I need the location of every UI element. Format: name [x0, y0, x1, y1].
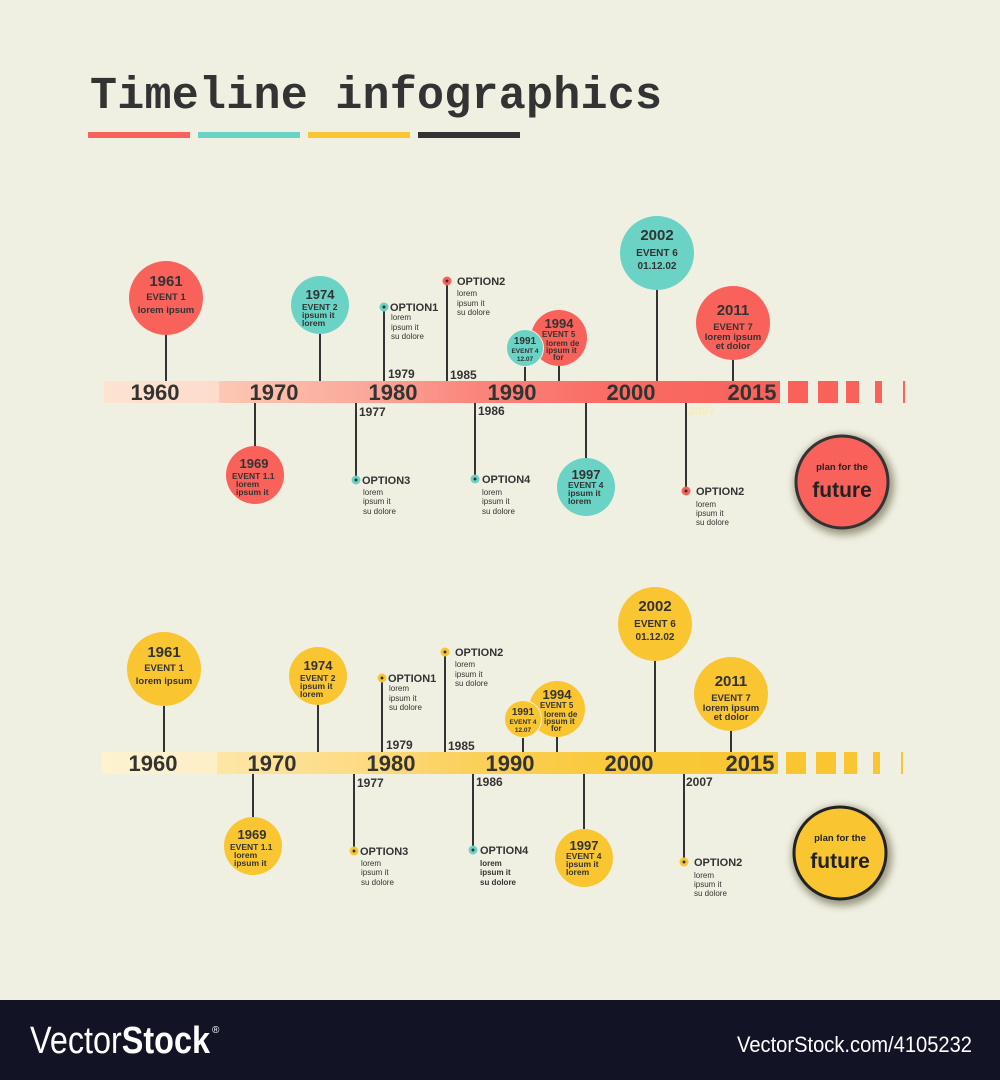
event 2011 — [696, 286, 770, 360]
event 1961: EVENT 1 — [146, 292, 187, 303]
year labels — [357, 738, 713, 790]
event 1961: 1961 — [149, 273, 183, 290]
options: su dolore — [694, 889, 727, 898]
panel: bottom timeline (yellow) — [102, 587, 903, 906]
year labels: 1986 — [478, 404, 505, 418]
event 1974: ipsum it — [302, 310, 335, 320]
event 1974: lorem — [302, 318, 326, 328]
event 1969: ipsum it — [234, 858, 267, 868]
event 1969: 1969 — [238, 827, 266, 842]
options: lorem — [696, 500, 716, 509]
event 1961: lorem ipsum — [136, 676, 192, 687]
event 1991: 12.07 — [515, 727, 532, 734]
timeline bar: 1970 — [250, 380, 298, 405]
event 1974 — [289, 647, 347, 705]
options: ipsum it — [696, 509, 724, 518]
options: OPTION4 — [480, 845, 529, 857]
options: su dolore — [361, 878, 394, 887]
event 2002: 2002 — [640, 227, 674, 244]
options: OPTION2 — [694, 857, 742, 869]
options: ipsum it — [391, 323, 419, 332]
timeline bar: 1990 — [488, 380, 536, 405]
options: lorem — [455, 660, 475, 669]
event 2011: EVENT 7 — [711, 693, 751, 704]
year labels: 1985 — [450, 368, 477, 382]
event 1974: 1974 — [306, 287, 335, 302]
event 2002: 01.12.02 — [638, 261, 677, 272]
options: ipsum it — [363, 497, 391, 506]
event 1974: lorem — [300, 689, 324, 699]
event 1969: ipsum it — [236, 487, 269, 497]
event 1997 — [555, 829, 613, 887]
event 1974 — [291, 276, 349, 334]
event 2011: lorem ipsum — [703, 703, 759, 714]
event 1974: EVENT 2 — [300, 673, 336, 683]
timeline bar: 1980 — [369, 380, 417, 405]
footer: VectorStock.com/4105232 — [737, 1032, 972, 1057]
event 2011: lorem ipsum — [705, 332, 761, 343]
panel: top timeline (red/teal) — [104, 216, 905, 535]
timeline bar — [102, 751, 903, 776]
options — [350, 647, 742, 898]
event 2002: EVENT 6 — [636, 248, 678, 259]
event 2011: et dolor — [714, 712, 749, 723]
year labels: 1985 — [448, 739, 475, 753]
footer: VectorStock — [30, 1020, 211, 1062]
event 1961 — [129, 261, 203, 335]
options: su dolore — [389, 703, 422, 712]
options: ipsum it — [455, 670, 483, 679]
footer: ® — [212, 1025, 220, 1036]
options: ipsum it — [361, 868, 389, 877]
event 1994 — [531, 310, 587, 366]
options: lorem — [457, 289, 477, 298]
event 1994: ipsum it — [546, 346, 577, 355]
options: OPTION3 — [362, 475, 410, 487]
event 1994: EVENT 5 — [540, 701, 574, 710]
year labels — [359, 367, 715, 419]
timeline bar: 2015 — [728, 380, 776, 405]
event 1969: lorem — [234, 850, 258, 860]
options: OPTION2 — [455, 647, 503, 659]
event 1991 — [504, 700, 542, 738]
event 1969: EVENT 1.1 — [232, 471, 275, 481]
event 1997: 1997 — [572, 467, 600, 482]
options: OPTION2 — [457, 276, 505, 288]
event 2011: 2011 — [717, 302, 749, 319]
options: lorem — [363, 488, 383, 497]
options: su dolore — [480, 878, 517, 887]
event 1974: ipsum it — [300, 681, 333, 691]
options: lorem — [482, 488, 502, 497]
options: ipsum it — [694, 880, 722, 889]
event 2011: 2011 — [715, 673, 747, 690]
options: OPTION1 — [390, 302, 438, 314]
timeline bar: 2000 — [607, 380, 655, 405]
future circle: future — [812, 479, 872, 502]
event 1994: 1994 — [545, 316, 574, 331]
timeline bar: 1970 — [248, 751, 296, 776]
event 1961: 1961 — [147, 644, 181, 661]
options: lorem — [480, 859, 502, 868]
options: OPTION3 — [360, 846, 408, 858]
event 1961 — [127, 632, 201, 706]
timeline bar: 1960 — [129, 751, 177, 776]
event 1969 — [224, 817, 282, 875]
options: OPTION4 — [482, 474, 531, 486]
options: ipsum it — [389, 694, 417, 703]
year labels: 1979 — [388, 367, 415, 381]
event 2011: et dolor — [716, 341, 751, 352]
event 1961: lorem ipsum — [138, 305, 194, 316]
event 1994: ipsum it — [544, 717, 575, 726]
event 1997: EVENT 4 — [568, 480, 604, 490]
timeline bar: 1990 — [486, 751, 534, 776]
event 1997: 1997 — [570, 838, 598, 853]
timeline bar: 2015 — [726, 751, 774, 776]
event 1991: 12.07 — [517, 356, 534, 363]
event 1997: lorem — [568, 496, 592, 506]
event 1974: 1974 — [304, 658, 333, 673]
options: ipsum it — [480, 868, 511, 877]
title: Timeline infographics — [90, 71, 662, 122]
options: su dolore — [696, 518, 729, 527]
event 2002 — [620, 216, 694, 290]
options: lorem — [389, 684, 409, 693]
options: su dolore — [455, 679, 488, 688]
event 1994 — [529, 681, 585, 737]
options: lorem — [391, 313, 411, 322]
event 1997: lorem — [566, 867, 590, 877]
event 1969: 1969 — [240, 456, 268, 471]
options: ipsum it — [457, 299, 485, 308]
options: su dolore — [391, 332, 424, 341]
event 1994: for — [551, 724, 562, 733]
timeline bar: 2000 — [605, 751, 653, 776]
options: OPTION1 — [388, 673, 436, 685]
timeline bar — [104, 380, 905, 405]
event 2002: 2002 — [638, 598, 672, 615]
future circle — [794, 435, 894, 535]
event 2002: EVENT 6 — [634, 619, 676, 630]
event 1994: lorem de — [546, 339, 580, 348]
event 1997: ipsum it — [568, 488, 601, 498]
future circle: plan for the — [814, 833, 866, 844]
event 1991: 1991 — [512, 707, 535, 718]
timeline bar: 1980 — [367, 751, 415, 776]
year labels: 1986 — [476, 775, 503, 789]
options: lorem — [361, 859, 381, 868]
event 1991: 1991 — [514, 336, 537, 347]
options: su dolore — [457, 308, 490, 317]
year labels: 1979 — [386, 738, 413, 752]
year labels: 1977 — [359, 405, 386, 419]
options: su dolore — [482, 507, 515, 516]
event 1969 — [226, 446, 284, 504]
event 1997: ipsum it — [566, 859, 599, 869]
options: lorem — [694, 871, 714, 880]
event 1991 — [506, 330, 544, 366]
future circle: plan for the — [816, 462, 868, 473]
event 1991: EVENT 4 — [509, 719, 537, 726]
event 1994: 1994 — [543, 687, 572, 702]
future circle: future — [810, 850, 870, 873]
year labels: 2007 — [688, 404, 715, 418]
event 2002 — [618, 587, 692, 661]
options: su dolore — [363, 507, 396, 516]
options: OPTION2 — [696, 486, 744, 498]
event 2011 — [694, 657, 768, 731]
options: ipsum it — [482, 497, 510, 506]
event 1994: for — [553, 353, 564, 362]
timeline bar: 1960 — [131, 380, 179, 405]
footer — [0, 1000, 1000, 1080]
future circle — [792, 806, 892, 906]
event 1991: EVENT 4 — [511, 348, 539, 355]
event 1994: lorem de — [544, 710, 578, 719]
event 1961: EVENT 1 — [144, 663, 185, 674]
options — [352, 276, 744, 527]
year labels: 2007 — [686, 775, 713, 789]
event 1969: lorem — [236, 479, 260, 489]
event 1969: EVENT 1.1 — [230, 842, 273, 852]
event 1994: EVENT 5 — [542, 330, 576, 339]
event 1974: EVENT 2 — [302, 302, 338, 312]
event 1997 — [557, 458, 615, 516]
year labels: 1977 — [357, 776, 384, 790]
event 1997: EVENT 4 — [566, 851, 602, 861]
title underline colors — [88, 132, 520, 138]
event 2011: EVENT 7 — [713, 322, 753, 333]
event 2002: 01.12.02 — [636, 632, 675, 643]
